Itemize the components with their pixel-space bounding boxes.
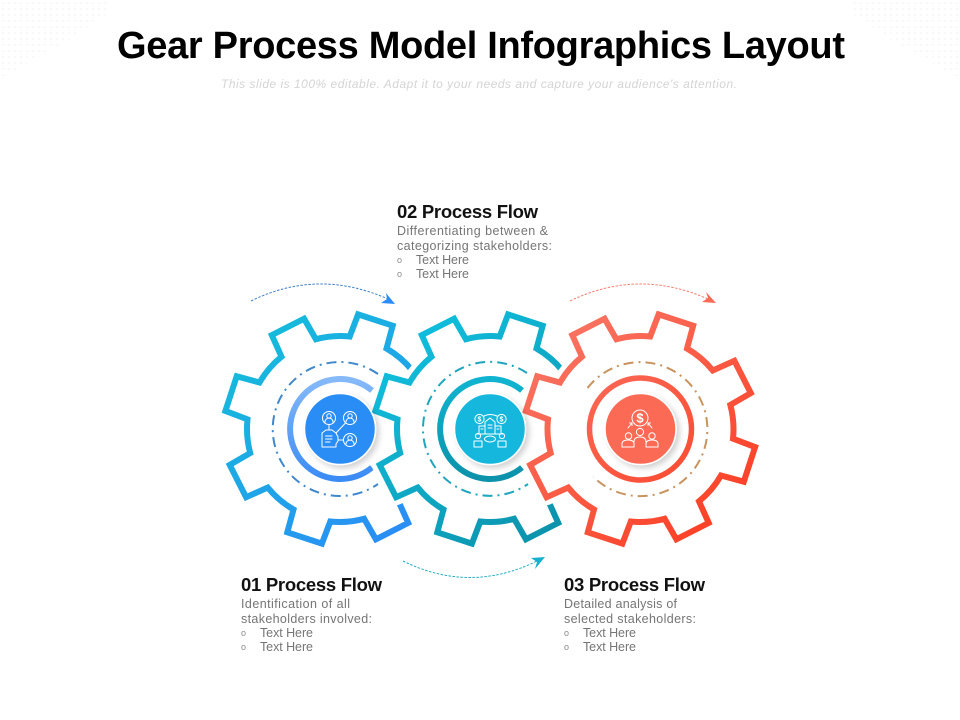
text block: 02 process flow: categorizing stakeholders: [397,239,552,253]
gear 1: blue [225,314,455,544]
text block: 03 process flow: Detailed analysis of [564,597,678,611]
gear 3 ring [590,378,692,480]
text block: 03 process flow: selected stakeholders: [564,612,696,626]
icon: building and investors: $ [478,416,482,424]
background dot pattern: top corners [0,0,960,78]
arrow: gear 2 to gear 3 [403,557,545,578]
arrow: after gear 3 [570,284,716,303]
gear 3: red [526,314,755,544]
text block: 02 process flow: Text Here [416,267,469,281]
text block: 01 process flow: Identification of all [241,597,350,611]
gear 1 dashed ring [273,362,378,496]
subtitle: This slide is 100% editable. Adapt it to your needs and capture your audience's attention. [221,77,737,91]
arrow: gear 1 to gear 2 [251,284,395,304]
text block: 03 process flow: Text Here [583,626,636,640]
gear 2: teal [375,314,605,544]
hub circle 1 [304,394,376,464]
text block: 03 process flow: Text Here [583,640,636,654]
text block: 03 process flow [564,574,706,654]
text block: 01 process flow: o [241,642,246,652]
text block: 03 process flow: o [564,628,569,638]
title: Gear Process Model Infographics Layout [117,25,845,67]
hub circle 3 [605,394,676,464]
text block: 01 process flow: Text Here [260,640,313,654]
gear 3 dashed ring [588,362,707,496]
text block: 02 process flow: Differentiating between & [397,224,549,238]
text block: 03 process flow: o [564,642,569,652]
text block: 02 process flow: 02 Process Flow [397,201,539,222]
text block: 02 process flow [397,201,552,281]
gear 2 dashed ring [423,362,528,496]
icon: building and investors [474,414,506,447]
gear 2 progress ring [440,379,522,479]
text block: 02 process flow: o [397,269,402,279]
text block: 02 process flow: Text Here [416,253,469,267]
text block: 01 process flow: Text Here [260,626,313,640]
hub circle 2 [454,394,526,464]
text block: 02 process flow: o [397,255,402,265]
text block: 01 process flow: 01 Process Flow [241,574,383,595]
icon: stakeholder network [322,412,356,447]
gear 1 progress ring [290,379,372,479]
text block: 01 process flow [241,574,383,654]
icon: team and dollar: $ [636,410,644,426]
icon: team and dollar [622,410,658,447]
icon: building and investors: $ [500,416,504,424]
text block: 01 process flow: o [241,628,246,638]
text block: 03 process flow: 03 Process Flow [564,574,706,595]
text block: 01 process flow: stakeholders involved: [241,612,372,626]
